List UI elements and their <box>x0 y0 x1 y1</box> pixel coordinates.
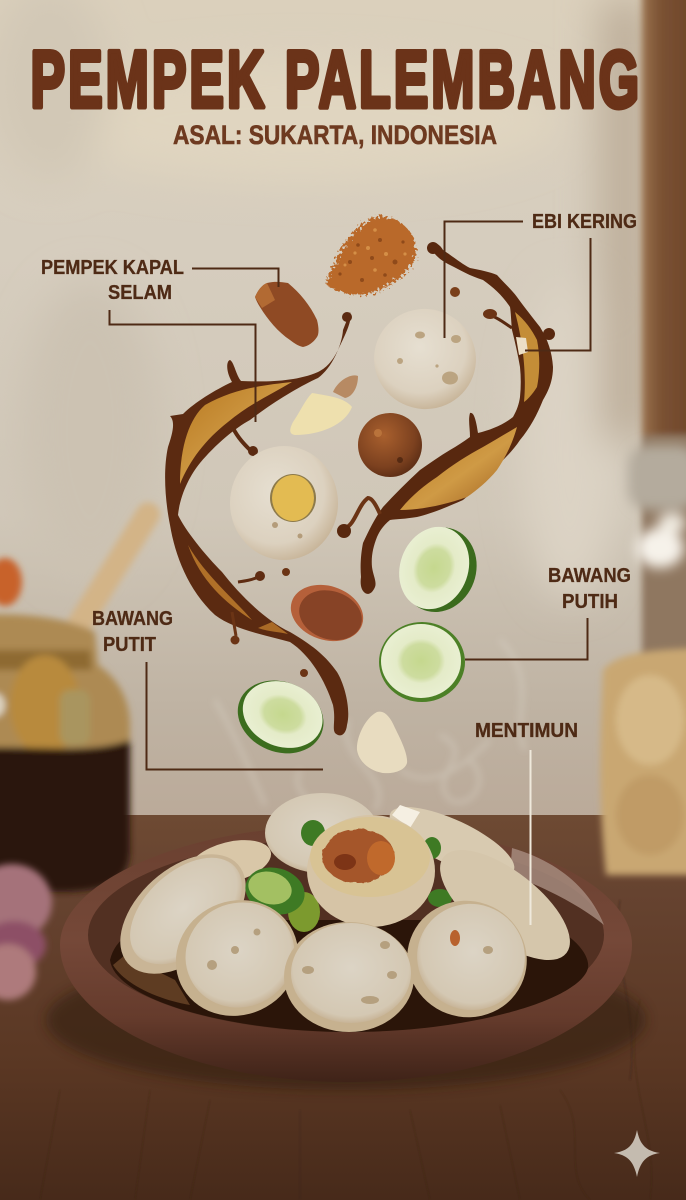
garlic clove lower <box>357 712 407 773</box>
label: mentimun: MENTIMUN <box>475 720 578 742</box>
wooden table <box>0 815 686 1200</box>
sauce splash right <box>337 242 555 594</box>
back pieces <box>184 793 523 907</box>
center topped piece <box>307 815 435 927</box>
label: pempek kapal selam: SELAM <box>108 282 172 304</box>
right slice <box>423 830 587 980</box>
label: ebi kering <box>444 211 637 350</box>
plate rim <box>60 825 632 1082</box>
cucumber in plate <box>240 861 320 932</box>
label: bawang putit <box>92 608 323 770</box>
pempek ball <box>358 413 422 477</box>
shallots <box>0 864 52 1000</box>
steam <box>215 640 525 810</box>
label: bawang putih <box>465 565 631 660</box>
ebi kering powder <box>326 217 416 295</box>
egg pempek <box>230 446 338 560</box>
front centre slice <box>284 922 414 1032</box>
garlic clove with peel <box>290 375 358 435</box>
sauce <box>110 920 588 1032</box>
front left slice <box>157 880 317 1036</box>
background wall <box>0 0 686 830</box>
front right slice <box>391 884 543 1034</box>
label: bawang putih: PUTIH <box>562 591 618 613</box>
label: pempek kapal selam: PEMPEK KAPAL <box>41 257 184 279</box>
wooden post <box>642 0 686 835</box>
subtitle: ASAL: SUKARTA, INDONESIA <box>173 120 497 150</box>
label: ebi kering: EBI KERING <box>532 211 637 233</box>
label: bawang putit: BAWANG <box>92 608 173 630</box>
cucumber slice upper <box>388 516 488 623</box>
sausage piece <box>283 576 371 650</box>
label: pempek kapal selam <box>41 257 278 422</box>
logo star <box>614 1130 660 1177</box>
cucumber slice lower <box>227 668 335 766</box>
fish cake with holes <box>363 298 487 420</box>
title: PEMPEK PALEMBANG <box>30 34 639 125</box>
glass bottle, right <box>628 445 686 568</box>
crispy jar, right <box>600 648 686 875</box>
cucumber slice middle <box>379 622 465 702</box>
left slice <box>98 831 268 997</box>
pempek kapal selam piece <box>255 282 318 347</box>
label: bawang putit: PUTIT <box>103 634 156 656</box>
jar with sauce, left <box>0 498 165 892</box>
sauce splash left <box>165 312 352 735</box>
label: bawang putih: BAWANG <box>548 565 631 587</box>
plate with pempek <box>46 793 646 1090</box>
